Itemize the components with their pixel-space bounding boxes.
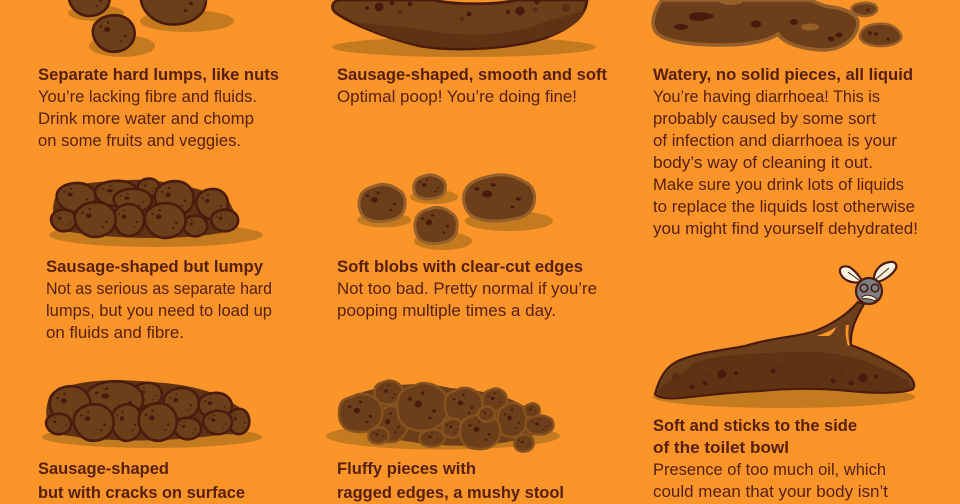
text: sticky stool: Soft and sticks to the side (653, 417, 857, 435)
text: cracked sausage: Sausage-shaped (38, 460, 169, 478)
text: soft blobs: Not too bad. Pretty normal if you’re (337, 280, 597, 298)
text: separate hard lumps: on some fruits and veggies. (38, 132, 241, 150)
text: cracked sausage (38, 460, 245, 502)
text: watery (653, 66, 918, 238)
text: sausage-shaped smooth: Sausage-shaped, smooth and soft (337, 66, 608, 84)
text: soft blobs (337, 258, 597, 320)
illustration: cracked sausage (42, 380, 262, 448)
text: fluffy pieces: ragged edges, a mushy stool (337, 484, 564, 502)
panel: sticky stool (653, 262, 915, 501)
illustration: soft blobs (357, 175, 553, 250)
text: sticky stool: Presence of too much oil, which (653, 461, 886, 479)
panel: watery (653, 0, 918, 238)
illustration: sticky stool with fly (653, 262, 915, 408)
illustration: watery puddle (653, 0, 901, 50)
text: watery: Make sure you drink lots of liquids (653, 176, 904, 194)
text: watery: of infection and diarrhoea is your (653, 132, 898, 150)
panel: sausage-shaped smooth (332, 0, 608, 106)
illustration: lumpy sausage (49, 179, 263, 247)
text: watery: probably caused by some sort (653, 110, 876, 128)
illustration: smooth sausage (332, 0, 596, 57)
text: separate hard lumps: Drink more water and chomp (38, 110, 254, 128)
text: separate hard lumps: Separate hard lumps, like nuts (38, 66, 279, 84)
text: watery: Watery, no solid pieces, all liquid (653, 66, 913, 84)
text: watery: to replace the liquids lost otherwise (653, 198, 915, 216)
panel: soft blobs (337, 175, 597, 320)
panel: cracked sausage (38, 380, 262, 502)
panel: sausage-shaped but lumpy (46, 179, 272, 342)
text: sticky stool: of the toilet bowl (653, 439, 789, 457)
text: fluffy pieces (337, 460, 564, 502)
illustration: fluffy pieces (326, 381, 560, 452)
panel: fluffy pieces (326, 381, 564, 502)
text: soft blobs: pooping multiple times a day. (337, 302, 556, 320)
illustration: hard lumps (68, 0, 234, 57)
text: sausage-shaped smooth: Optimal poop! You’re doing fine! (337, 88, 577, 106)
text: separate hard lumps (38, 66, 279, 150)
text: sausage-shaped but lumpy: Sausage-shaped but lumpy (46, 258, 264, 276)
text: sticky stool (653, 417, 888, 501)
panel: separate hard lumps (38, 0, 279, 150)
text: sausage-shaped but lumpy (46, 258, 272, 342)
text: sausage-shaped but lumpy: on fluids and fibre. (46, 324, 184, 342)
text: watery: You’re having diarrhoea! This is (653, 88, 880, 106)
text: sausage-shaped but lumpy: Not as serious as separate hard (46, 280, 272, 298)
text: separate hard lumps: You’re lacking fibre and fluids. (38, 88, 257, 106)
text: sausage-shaped smooth (337, 66, 608, 106)
text: fluffy pieces: Fluffy pieces with (337, 460, 476, 478)
text: cracked sausage: but with cracks on surface (38, 484, 245, 502)
text: watery: body’s way of cleaning it out. (653, 154, 873, 172)
text: watery: you might find yourself dehydrated! (653, 220, 918, 238)
text: sausage-shaped but lumpy: lumps, but you need to load up (46, 302, 272, 320)
icon: fly (840, 262, 896, 304)
text: soft blobs: Soft blobs with clear-cut edges (337, 258, 583, 276)
text: sticky stool: could mean that your body isn’t (653, 483, 888, 501)
